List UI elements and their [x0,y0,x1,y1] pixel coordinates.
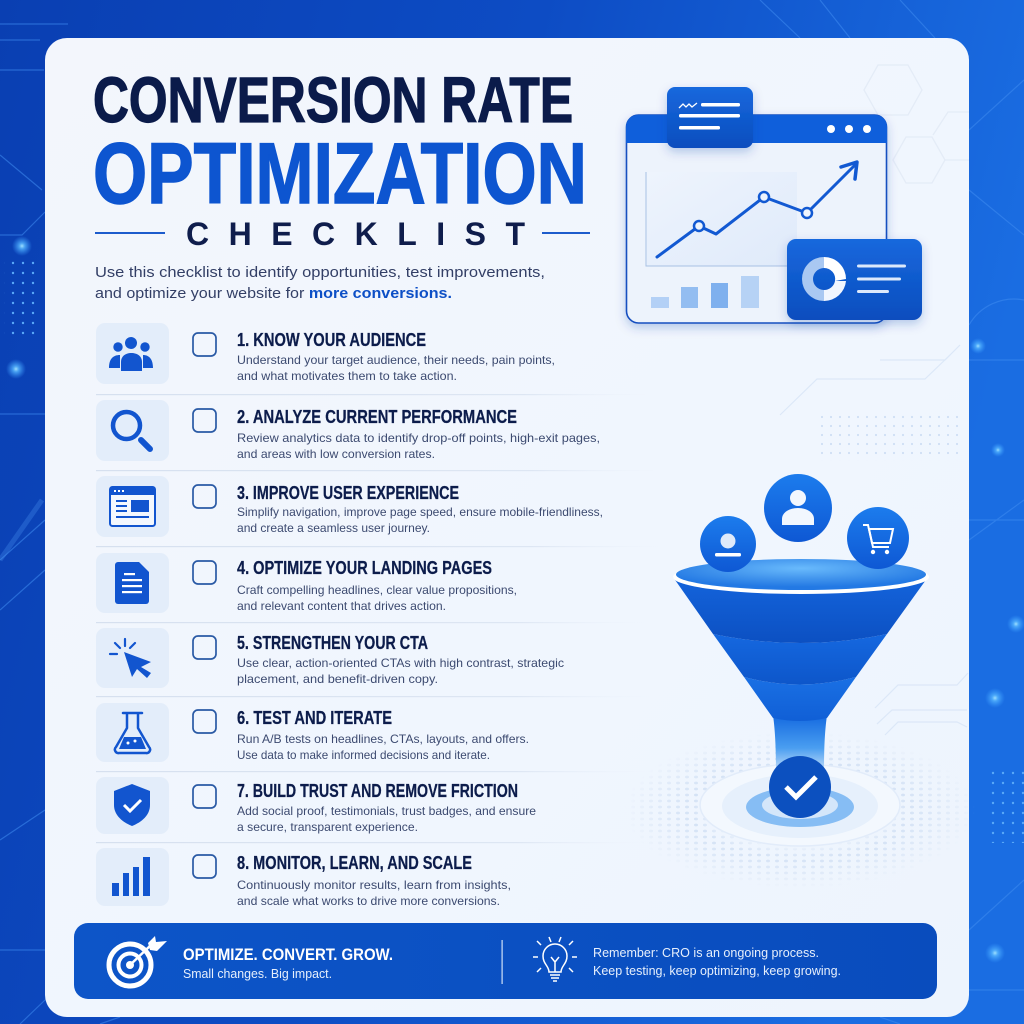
checklist item 6 [96,703,529,762]
icon: audience [96,323,169,384]
icon: web page [96,476,169,537]
checklist item 1: 1. KNOW YOUR AUDIENCE [237,330,426,350]
checklist item 7 [96,777,536,834]
banner reminder text: Keep testing, keep optimizing, keep growing. [593,963,841,978]
checklist item 3: 3. IMPROVE USER EXPERIENCE [237,483,459,503]
checklist item 2 [96,400,600,461]
funnel neck [773,715,827,775]
title: conversion rate: CONVERSION RATE [93,64,573,136]
checklist item 3: and create a seamless user journey. [237,521,430,535]
checklist item 6: Run A/B tests on headlines, CTAs, layouts, and offers. [237,732,529,746]
checklist item 8: 8. MONITOR, LEARN, AND SCALE [237,853,472,873]
checklist item 6: 6. TEST AND ITERATE [237,708,392,728]
icon: user [764,474,832,542]
checklist item 3: Simplify navigation, improve page speed, ensure mobile-friendliness, [237,505,603,519]
halftone base rings [642,741,956,880]
funnel illustration [642,474,956,880]
checklist item 3 [96,476,603,537]
small bars [651,276,759,308]
checklist item 2: Review analytics data to identify drop-off points, high-exit pages, [237,431,600,445]
checklist item 7: a secure, transparent experience. [237,820,418,834]
banner heading: OPTIMIZE. CONVERT. GROW. [183,945,393,964]
icon: person badge [700,516,756,572]
checklist item 2: and areas with low conversion rates. [237,447,435,461]
icon: magnifier [96,400,169,461]
checklist item 1 [96,323,555,384]
icon: cursor click [96,628,169,688]
checklist item 4: Craft compelling headlines, clear value propositions, [237,583,517,597]
intro text: Use this checklist to identify opportunities, test improvements, [95,265,545,281]
intro text [95,265,545,302]
icon: shield [96,777,169,834]
checklist item 7: 7. BUILD TRUST AND REMOVE FRICTION [237,781,518,801]
banner subheading: Small changes. Big impact. [183,966,332,981]
icon: check circle [769,756,831,818]
donut card [787,239,922,320]
icon: target [109,936,167,986]
checklist item 6: Use data to make informed decisions and iterate. [237,748,490,762]
intro text: and optimize your website for more conversions. [95,286,452,302]
checklist item 1: and what motivates them to take action. [237,369,457,383]
icon: document [96,553,169,613]
checklist item 2: 2. ANALYZE CURRENT PERFORMANCE [237,407,517,427]
checklist item 8 [96,848,511,908]
checklist item 4: 4. OPTIMIZE YOUR LANDING PAGES [237,558,492,578]
banner: bottom call to action [74,923,937,999]
line chart with arrow [646,162,857,266]
icon: flask [96,703,169,762]
floating stat tag [667,87,753,148]
checklist item 4 [96,553,517,613]
dashboard illustration [626,87,922,323]
checklist item 5: Use clear, action-oriented CTAs with high contrast, strategic [237,656,564,670]
checklist item 5: placement, and benefit-driven copy. [237,672,438,686]
icon: light bulb [533,937,577,981]
subtitle: checklist with rules: CHECKLIST [186,216,525,252]
checklist item 5 [96,628,564,688]
title: optimization: OPTIMIZATION [93,126,587,222]
banner reminder text [593,945,841,978]
browser window [626,115,887,323]
checklist item 1: Understand your target audience, their needs, pain points, [237,353,555,367]
icon: bar chart [96,848,169,906]
checklist item 4: and relevant content that drives action. [237,599,446,613]
funnel body [673,559,929,721]
banner reminder text: Remember: CRO is an ongoing process. [593,945,819,960]
checklist item 5: 5. STRENGTHEN YOUR CTA [237,633,428,653]
checklist item 7: Add social proof, testimonials, trust badges, and ensure [237,804,536,818]
icon: shopping cart [847,507,909,569]
checklist item 8: and scale what works to drive more conversions. [237,894,500,908]
checklist item 8: Continuously monitor results, learn from insights, [237,878,511,892]
